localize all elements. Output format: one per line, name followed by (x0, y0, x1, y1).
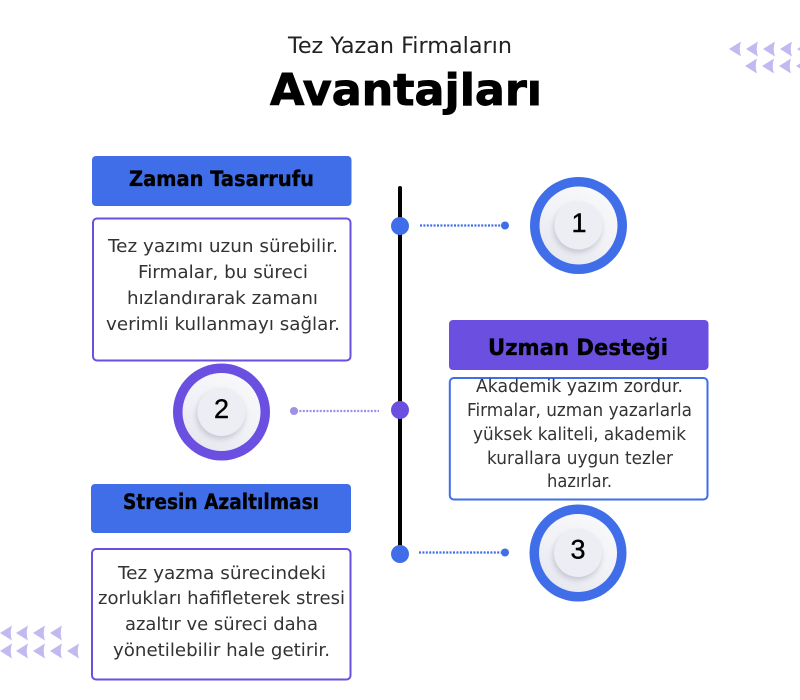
title (270, 34, 542, 116)
title: Tez Yazan Firmaların (287, 34, 512, 59)
text block: Stresin Azaltılması (92, 549, 350, 680)
text block: Zaman Tasarrufu: verimli kullanmayı sağlar. (106, 314, 340, 335)
title: Avantajları (270, 65, 542, 116)
text block: Zaman Tasarrufu: Tez yazımı uzun sürebilir. (107, 236, 338, 257)
text block: Uzman Desteği (450, 376, 708, 500)
connector 3 (419, 548, 509, 556)
heading: Uzman Desteği: Uzman Desteği (488, 336, 668, 361)
connector 1 (420, 222, 509, 230)
badge 3: 3 (570, 534, 586, 564)
text block: Uzman Desteği: yüksek kaliteli, akademik (473, 424, 687, 445)
badge 1: 1 (571, 208, 587, 238)
heading: Uzman Desteği (449, 320, 708, 370)
heading: Stresin Azaltılması: Stresin Azaltılması (123, 490, 319, 514)
badge 1 (530, 177, 627, 274)
text block: Stresin Azaltılması: Tez yazma sürecindeki (117, 563, 326, 584)
text block: Zaman Tasarrufu: Firmalar, bu süreci (138, 262, 308, 283)
text block: Stresin Azaltılması: yönetilebilir hale getirir. (113, 640, 330, 661)
badge 3 (530, 504, 626, 602)
text block: Zaman Tasarrufu (93, 218, 350, 360)
text block: Uzman Desteği: Akademik yazım zordur. (476, 376, 683, 397)
heading: Zaman Tasarrufu (92, 156, 352, 206)
decorative arrows: top right (729, 42, 800, 74)
heading: Zaman Tasarrufu: Zaman Tasarrufu (129, 167, 314, 191)
heading: Stresin Azaltılması (91, 484, 351, 533)
connector 2 (290, 407, 379, 415)
badge 2 (173, 364, 270, 460)
timeline (391, 186, 409, 563)
decorative arrows: bottom left (0, 626, 79, 658)
text block: Uzman Desteği: hazırlar. (547, 471, 612, 492)
badge 2: 2 (214, 394, 229, 424)
text block: Zaman Tasarrufu: hızlandırarak zamanı (127, 288, 318, 309)
text block: Uzman Desteği: Firmalar, uzman yazarlarla (467, 400, 692, 421)
text block: Uzman Desteği: kurallara uygun tezler (487, 448, 674, 469)
text block: Stresin Azaltılması: azaltır ve süreci daha (125, 614, 318, 635)
text block: Stresin Azaltılması: zorlukları hafifleterek stresi (98, 588, 345, 609)
